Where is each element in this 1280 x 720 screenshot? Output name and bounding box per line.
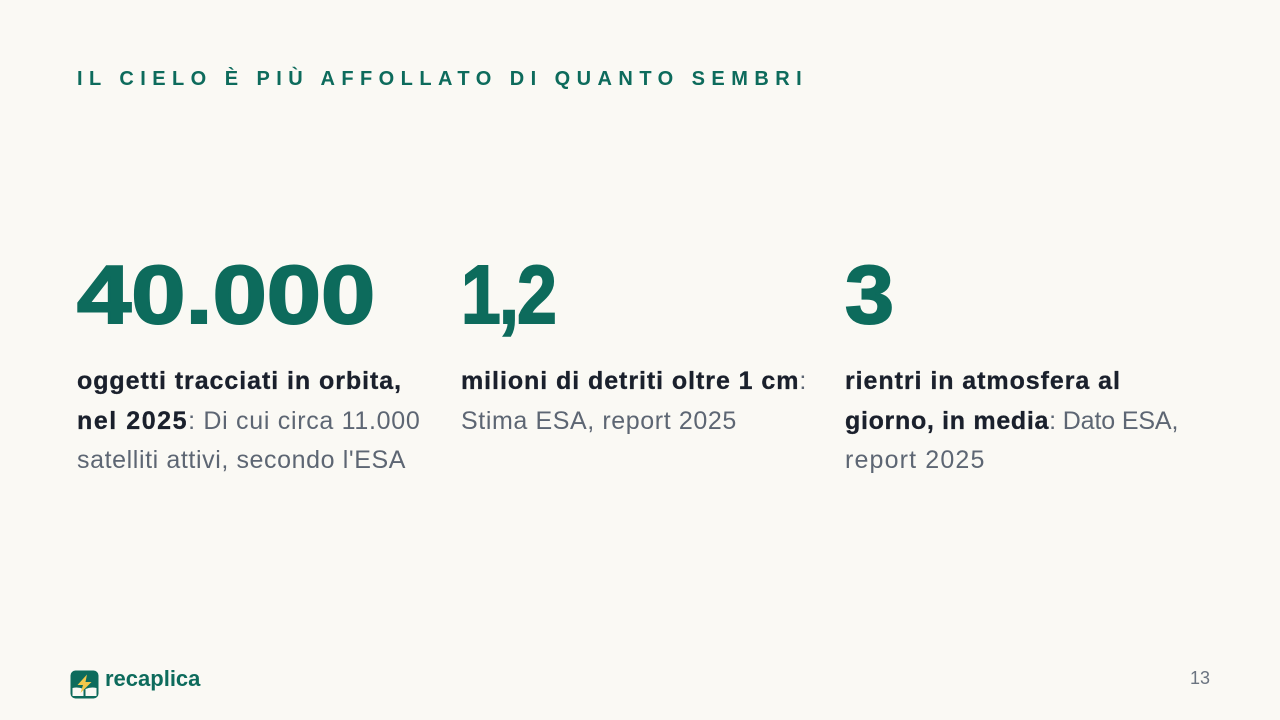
number: 40.000: 40.000 — [77, 248, 375, 341]
description: re-entries — [845, 367, 1178, 474]
stat: re-entries — [845, 248, 1178, 474]
description: tracked objects: oggetti tracciati in orbita, — [77, 367, 402, 395]
title: IL CIELO È PIÙ AFFOLLATO DI QUANTO SEMBRI — [77, 68, 808, 90]
page number: 13 — [1190, 668, 1210, 688]
description: re-entries: giorno, in media: Dato ESA, — [845, 406, 1178, 434]
description: tracked objects — [77, 367, 420, 474]
description: tracked objects: satelliti attivi, secondo l'ESA — [77, 446, 406, 474]
icon: lightning bolt and book — [70, 670, 98, 698]
number: 1,2: 1,2 — [461, 248, 555, 341]
description: debris: Stima ESA, report 2025 — [461, 406, 737, 434]
description: re-entries: report 2025 — [845, 446, 986, 474]
wordmark: recaplica — [105, 666, 200, 691]
description: debris: milioni di detriti oltre 1 cm: — [461, 367, 807, 395]
number: 3: 3 — [845, 248, 894, 341]
stat: tracked objects — [77, 248, 420, 474]
description: debris — [461, 367, 807, 434]
description: tracked objects: nel 2025: Di cui circa 11.000 — [77, 406, 420, 434]
description: re-entries: rientri in atmosfera al — [845, 367, 1121, 395]
stat: debris — [461, 248, 807, 434]
logo — [70, 666, 200, 698]
